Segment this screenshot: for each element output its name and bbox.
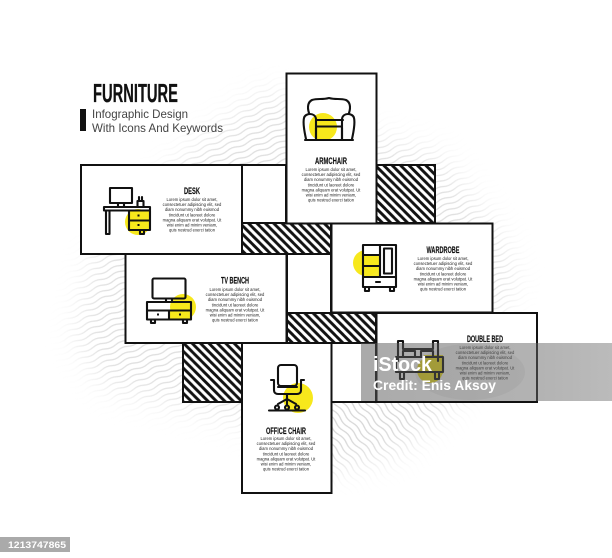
text: tv bench: wisi enim ad minim veniam, bbox=[210, 312, 260, 318]
text: armchair: tincidunt ut laoreet dolore bbox=[308, 182, 355, 187]
text: tv bench: consectetuer adipiscing elit, sed bbox=[206, 292, 265, 297]
text: office chair: consectetuer adipiscing elit, sed bbox=[257, 441, 316, 446]
heading: tv bench: TV BENCH bbox=[221, 276, 249, 286]
image id tag bbox=[0, 537, 70, 552]
image id number: 1213747865 bbox=[8, 540, 67, 551]
text: office chair: tincidunt ut laoreet dolore bbox=[263, 451, 310, 456]
title block bbox=[80, 78, 223, 135]
watermark band bbox=[361, 343, 612, 401]
text: wardrobe: diam nonummy nibh euismod bbox=[416, 266, 471, 271]
text: tv bench: quis nostrud exerci tation bbox=[212, 318, 259, 323]
text: desk: Lorem ipsum dolor sit amet, bbox=[166, 197, 218, 202]
text: double bed: wisi enim ad minim veniam, bbox=[460, 370, 510, 376]
icon: wardrobe bbox=[353, 245, 396, 291]
icon: desk bbox=[104, 188, 151, 235]
text: desk: tincidunt ut laoreet dolore bbox=[169, 212, 216, 217]
heading: desk: DESK bbox=[184, 186, 200, 197]
title: FURNITURE bbox=[93, 78, 178, 108]
icon: office chair bbox=[269, 365, 313, 413]
text: office chair: magna aliquam erat volutpat. Ut bbox=[257, 456, 316, 461]
connector panel: upper white block bbox=[242, 165, 286, 223]
text: wardrobe: tincidunt ut laoreet dolore bbox=[420, 271, 467, 276]
connector panel: middle white block bbox=[287, 254, 331, 313]
heading: office chair: OFFICE CHAIR bbox=[266, 426, 306, 437]
watermark credit: Credit: Enis Aksoy bbox=[373, 378, 497, 393]
text: office chair: diam nonummy nibh euismod bbox=[259, 446, 314, 451]
watermark soft shape bbox=[415, 344, 525, 400]
background wave pattern bbox=[69, 87, 520, 478]
icon: tv bench bbox=[147, 278, 196, 323]
text: desk: consectetuer adipiscing elit, sed bbox=[163, 202, 222, 207]
text: wardrobe: magna aliquam erat volutpat. Ut bbox=[414, 276, 473, 281]
text: tv bench: diam nonummy nibh euismod bbox=[208, 297, 263, 302]
text: desk: quis nostrud exerci tation bbox=[169, 228, 216, 233]
text: desk: diam nonummy nibh euismod bbox=[165, 207, 220, 212]
heading: wardrobe: WARDROBE bbox=[426, 245, 460, 256]
text: armchair: wisi enim ad minim veniam, bbox=[306, 192, 356, 198]
icon: double bed bbox=[396, 341, 443, 383]
text: armchair: Lorem ipsum dolor sit amet, bbox=[305, 167, 357, 172]
hatch: top right bbox=[376, 165, 435, 223]
heading: armchair: ARMCHAIR bbox=[315, 156, 347, 167]
text: double bed: diam nonummy nibh euismod bbox=[458, 355, 513, 360]
text: armchair: diam nonummy nibh euismod bbox=[304, 177, 359, 182]
icon: armchair bbox=[304, 98, 354, 141]
text: wardrobe: consectetuer adipiscing elit, sed bbox=[414, 261, 473, 266]
text: wardrobe: quis nostrud exerci tation bbox=[420, 287, 467, 292]
hatch: lower left bbox=[183, 343, 242, 402]
text: desk: magna aliquam erat volutpat. Ut bbox=[163, 217, 222, 222]
hatch: centre right bbox=[287, 313, 376, 343]
text: armchair: magna aliquam erat volutpat. Ut bbox=[302, 187, 361, 192]
panel: wardrobe bbox=[332, 224, 492, 312]
subtitle: Infographic Design bbox=[92, 107, 188, 121]
watermark logo text: iStock bbox=[373, 354, 433, 376]
text: double bed: magna aliquam erat volutpat. Ut bbox=[456, 365, 515, 370]
panel: office chair bbox=[242, 343, 332, 493]
text: double bed: quis nostrud exerci tation bbox=[462, 376, 509, 381]
text: armchair: quis nostrud exerci tation bbox=[308, 198, 355, 203]
panel: tv bench bbox=[126, 254, 286, 343]
text: armchair: consectetuer adipiscing elit, sed bbox=[302, 172, 361, 177]
text: tv bench: tincidunt ut laoreet dolore bbox=[212, 302, 259, 307]
text: office chair: wisi enim ad minim veniam, bbox=[261, 462, 311, 466]
hatch: centre bbox=[242, 223, 331, 254]
text: double bed: tincidunt ut laoreet dolore bbox=[462, 360, 509, 365]
panel: desk bbox=[81, 165, 242, 254]
text: office chair: Lorem ipsum dolor sit amet, bbox=[260, 436, 312, 441]
text: tv bench: magna aliquam erat volutpat. Ut bbox=[206, 307, 265, 312]
connector panel: lower white block bbox=[331, 343, 376, 402]
text: double bed: consectetuer adipiscing elit, sed bbox=[456, 350, 515, 355]
heading: double bed: DOUBLE BED bbox=[467, 334, 503, 345]
panel: double bed bbox=[376, 313, 537, 402]
text: wardrobe: wisi enim ad minim veniam, bbox=[418, 282, 468, 286]
title accent bar bbox=[80, 109, 86, 131]
panel: armchair bbox=[286, 74, 376, 224]
text: double bed: Lorem ipsum dolor sit amet, bbox=[459, 345, 511, 350]
text: office chair: quis nostrud exerci tation bbox=[263, 467, 310, 472]
text: tv bench: Lorem ipsum dolor sit amet, bbox=[209, 287, 261, 292]
subtitle second line: With Icons And Keywords bbox=[92, 121, 223, 135]
text: wardrobe: Lorem ipsum dolor sit amet, bbox=[417, 256, 469, 261]
text: desk: wisi enim ad minim veniam, bbox=[167, 222, 217, 228]
